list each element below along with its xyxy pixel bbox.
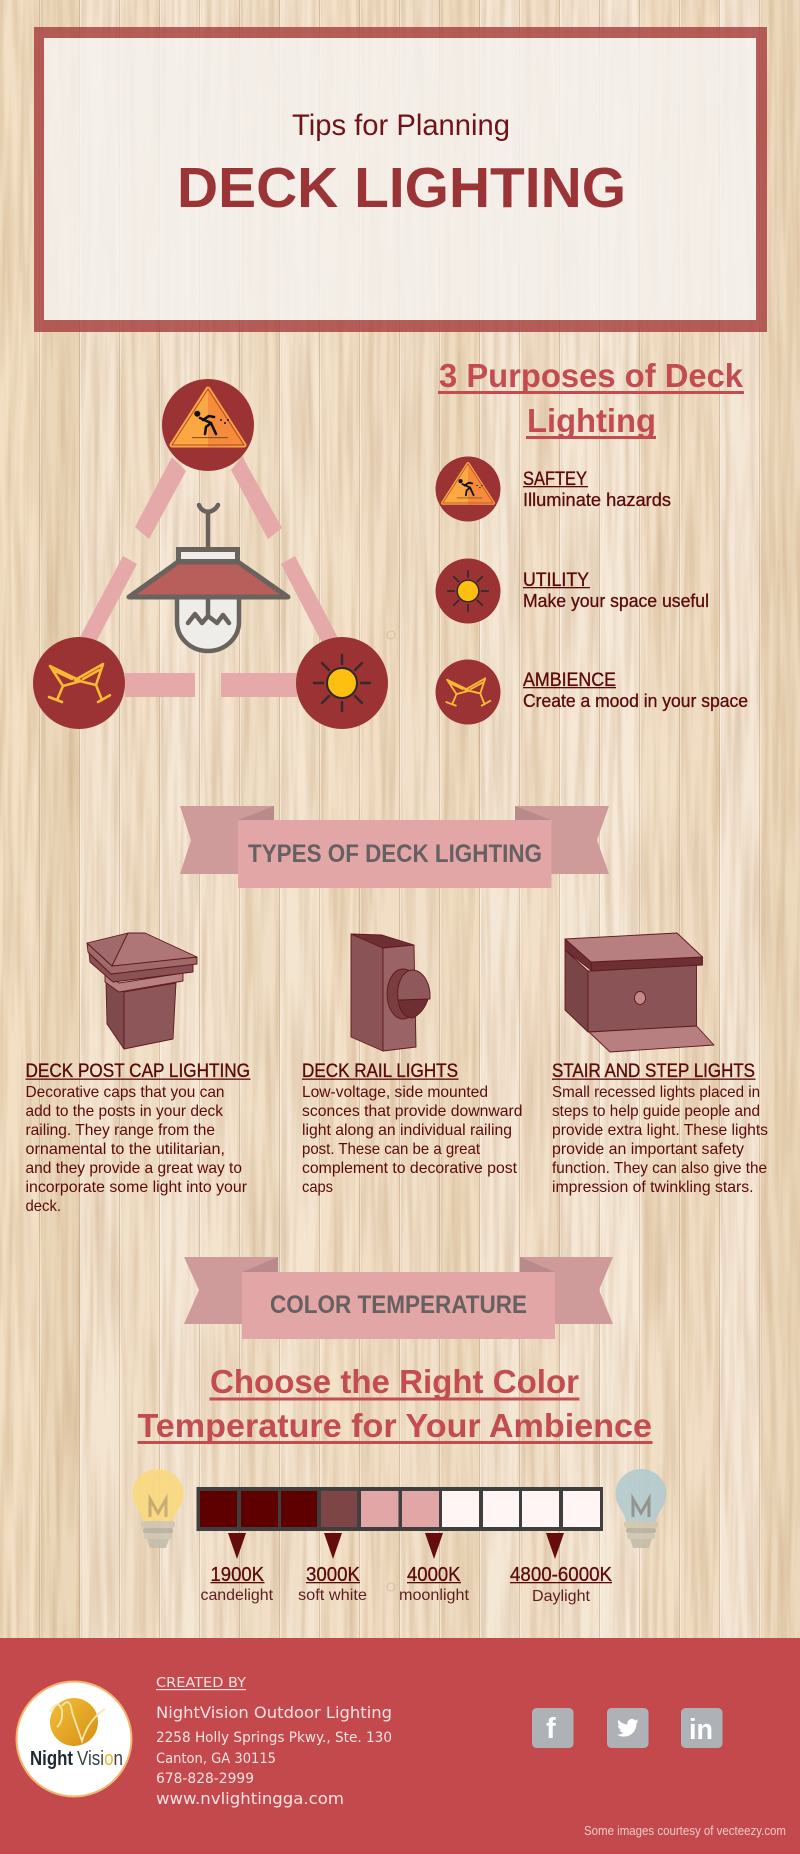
marker: 3000K soft white: soft white [298,1587,367,1604]
triangle connector bars [80,456,338,697]
text block: deck rail lights: light along an individual railing [302,1122,512,1139]
text block: stair and step lights: function. They can also give the [552,1160,767,1177]
text block: stair and step lights: STAIR AND STEP LIGHTS [552,1061,755,1082]
text block: deck post cap lighting: deck. [26,1198,61,1215]
text block: deck post cap lighting: incorporate some light into your [26,1179,248,1196]
marker: 1900K candelight: candelight [200,1587,274,1604]
footer panel [0,1638,800,1854]
purpose: safety: SAFTEY [523,468,587,490]
heading: 3 purposes: 3 Purposes of Deck [439,357,744,394]
creator details [156,1676,392,1808]
icon: facebook: f [546,1713,556,1745]
icon: utility circle [296,637,388,729]
marker: 3000K soft white: 3000K [306,1564,361,1586]
creator details: 678-828-2999 [156,1771,254,1787]
icon: warm bulb [132,1469,184,1548]
text block: deck post cap lighting: ornamental to the utilitarian, [26,1141,225,1158]
ribbon: types of deck lighting [180,806,609,888]
text block: deck rail lights: caps [302,1179,333,1196]
ribbon: color temperature [184,1257,613,1339]
text block: deck rail lights: Low-voltage, side mounted [302,1084,488,1101]
creator details: NightVision Outdoor Lighting [156,1703,392,1722]
marker: 3000K soft white [298,1533,367,1604]
main title: DECK LIGHTING [177,156,626,220]
icon: post cap light [87,933,197,1049]
heading: choose the right color temperature [138,1363,652,1444]
icon: rail light [351,934,430,1051]
text block: deck post cap lighting: Decorative caps that you can [26,1084,224,1101]
purpose: safety [436,456,671,522]
icon: linkedin [681,1708,722,1748]
icon: safety circle [162,379,254,471]
text block: stair and step lights: provide an important safety [552,1141,744,1158]
purpose: utility: Make your space useful [523,591,709,611]
icon: twitter [607,1708,648,1748]
text block: deck rail lights: post. These can be a great [302,1141,481,1158]
icon: cool bulb [616,1469,666,1548]
text block: deck post cap lighting [26,1061,250,1215]
text block: stair and step lights: provide extra light. These lights [552,1122,768,1139]
text block: stair and step lights: impression of twinkling stars. [552,1179,754,1196]
purpose: ambience [436,660,748,724]
text block: deck post cap lighting: add to the posts in your deck [26,1103,224,1120]
marker: 4000K moonlight: moonlight [399,1587,470,1604]
title panel [34,27,767,332]
logo: NightVision [16,1682,132,1796]
ribbon: types of deck lighting: TYPES OF DECK LIGHTING [248,840,542,868]
creator details: CREATED BY [156,1676,246,1691]
text block: deck rail lights: DECK RAIL LIGHTS [302,1061,458,1082]
marker: 4000K moonlight: 4000K [407,1564,461,1586]
icon: hanging lamp [129,505,288,651]
icon: facebook [532,1708,574,1748]
logo: NightVision: Vision [77,1748,123,1770]
text block: stair and step lights: Small recessed lights placed in [552,1084,760,1101]
text block: deck post cap lighting: and they provide a great way to [26,1160,242,1177]
marker: 4800-6000K daylight: Daylight [532,1588,591,1605]
purpose: safety: Illuminate hazards [523,490,671,510]
ribbon: color temperature: COLOR TEMPERATURE [270,1291,527,1319]
text block: deck post cap lighting: railing. They range from the [26,1122,215,1139]
purpose: ambience: AMBIENCE [523,669,616,691]
purpose: utility: UTILITY [523,569,589,591]
text block: stair and step lights: steps to help guide people and [552,1103,760,1120]
creator details: www.nvlightingga.com [156,1789,344,1808]
text block: deck rail lights: sconces that provide downward [302,1103,522,1120]
text block: deck rail lights [302,1061,522,1196]
creator details: Canton, GA 30115 [156,1751,276,1767]
text block: deck post cap lighting: DECK POST CAP LIGHTING [26,1061,250,1082]
subtitle: Tips for Planning [292,109,510,142]
purpose: utility [436,558,709,624]
purpose: ambience: Create a mood in your space [523,691,748,711]
heading: 3 purposes: Lighting [527,402,656,439]
purposes triangle diagram [33,379,388,729]
marker: 1900K candelight [200,1533,274,1604]
text block: deck rail lights: complement to decorative post [302,1160,518,1177]
icon: ambience circle [33,637,125,729]
text block: stair and step lights [552,1061,768,1196]
marker: 4800-6000K daylight: 4800-6000K [510,1564,613,1586]
logo: NightVision: Night [30,1748,73,1770]
icon: linkedin: in [689,1714,713,1746]
marker: 4800-6000K daylight [510,1533,613,1605]
heading: choose the right color temperature: Choose the Right Color [210,1363,579,1400]
icon: stair light [565,933,714,1052]
marker: 1900K candelight: 1900K [210,1564,265,1586]
marker: 4000K moonlight [399,1533,470,1604]
heading: choose the right color temperature: Temperature for Your Ambience [138,1407,652,1444]
heading: 3 purposes [438,357,744,439]
creator details: 2258 Holly Springs Pkwy., Ste. 130 [156,1730,392,1746]
color temperature scale [196,1487,603,1531]
